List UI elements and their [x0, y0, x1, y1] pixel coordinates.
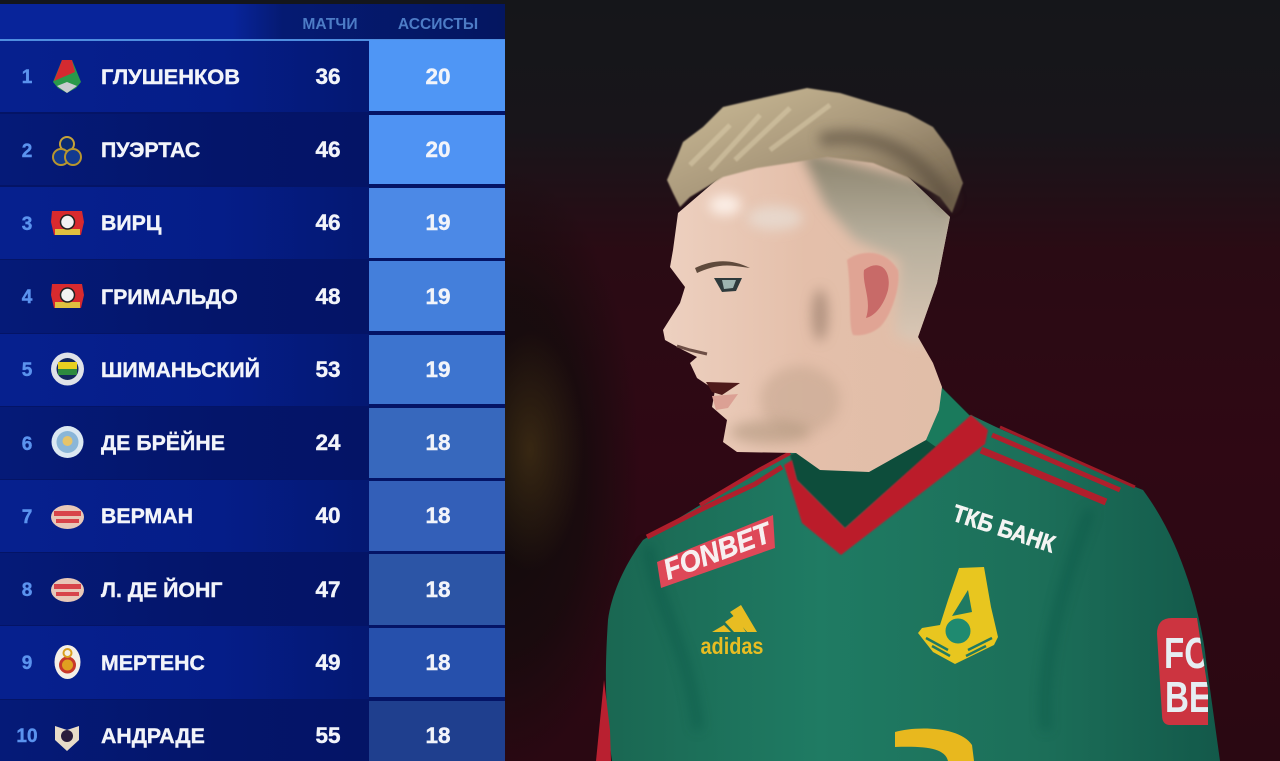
jaw and stubble	[760, 366, 840, 434]
inner collar	[790, 387, 971, 528]
row 3: ВИРЦ	[101, 211, 162, 235]
eye and brow	[695, 261, 750, 273]
nose shadow	[677, 346, 707, 354]
row 10: АНДРАДЕ	[101, 724, 205, 748]
ear	[847, 253, 899, 335]
row 6: 18	[425, 430, 451, 455]
row 10	[0, 700, 505, 761]
hair highlights	[690, 105, 830, 170]
row 6: ДЕ БРЁЙНЕ	[101, 430, 225, 455]
row 5: ШИМАНЬСКИЙ	[101, 357, 260, 382]
row 9	[0, 626, 505, 699]
photo: player background	[505, 0, 1280, 761]
row 1: 1	[22, 67, 33, 88]
row 3	[0, 187, 505, 259]
row 6	[0, 407, 505, 479]
row 8: Л. ДЕ ЙОНГ	[101, 577, 222, 602]
row 6: 24	[315, 430, 341, 455]
FONBET sponsor: FONBET	[659, 517, 777, 587]
table header: АССИСТЫ	[398, 16, 478, 33]
row 1: 20	[425, 64, 451, 89]
row 4: ГРИМАЛЬДО	[101, 285, 238, 309]
row 4	[0, 260, 505, 333]
collar green fold	[926, 387, 971, 447]
temple fade	[800, 150, 960, 345]
left sleeve print	[596, 680, 611, 761]
sleeve patch: BE	[1165, 673, 1211, 722]
row 1: 36	[315, 64, 341, 89]
adidas logo	[700, 605, 764, 659]
shirt number fragment	[895, 728, 974, 761]
row 5: 19	[425, 357, 451, 382]
row 7: ВЕРМАН	[101, 504, 193, 528]
hair	[667, 88, 963, 213]
row 8: 18	[425, 577, 451, 602]
row 4: 19	[425, 284, 451, 309]
row 9: 9	[22, 653, 32, 674]
table header: МАТЧИ	[302, 16, 358, 33]
table header	[0, 0, 505, 41]
panel: assists table	[0, 0, 505, 761]
sleeve seam shadows	[648, 510, 1090, 730]
ТКБ БАНК sponsor: ТКБ БАНК	[949, 500, 1059, 559]
row 7: 40	[315, 503, 341, 528]
club crest on shirt	[918, 567, 998, 664]
sleeve patch	[1157, 618, 1208, 725]
photo: player	[596, 88, 1220, 761]
row 4: 48	[315, 284, 341, 309]
row 2: 46	[315, 137, 341, 162]
row 6: 6	[22, 434, 32, 455]
red collar	[784, 415, 988, 555]
row 10: 55	[315, 723, 341, 748]
row 7	[0, 480, 505, 552]
row 8	[0, 553, 505, 625]
row 7: 7	[22, 507, 32, 528]
row 7: 18	[425, 503, 451, 528]
row 5: 53	[315, 357, 341, 382]
row 2: 20	[425, 137, 451, 162]
sleeve patch: FO	[1164, 629, 1210, 678]
row 1: ГЛУШЕНКОВ	[101, 65, 240, 89]
head and neck	[663, 156, 950, 472]
row 8: 47	[315, 577, 341, 602]
row 2: 2	[22, 141, 32, 162]
adidas logo: adidas	[700, 633, 764, 659]
hair underside shadow	[820, 138, 950, 205]
row 3: 3	[22, 214, 32, 235]
shirt	[606, 415, 1220, 761]
row 4: 4	[22, 287, 33, 308]
row 5	[0, 334, 505, 406]
row 9: 18	[425, 650, 451, 675]
row 5: 5	[22, 360, 33, 381]
row 3: 46	[315, 210, 341, 235]
mouth	[706, 382, 740, 395]
row 10: 10	[16, 726, 38, 747]
row 10: 18	[425, 723, 451, 748]
row 8: 8	[22, 580, 32, 601]
forehead highlight	[709, 195, 741, 215]
row 9: 49	[315, 650, 341, 675]
row 3: 19	[425, 210, 451, 235]
left shoulder stripes	[647, 467, 782, 537]
row 9: МЕРТЕНС	[101, 651, 205, 675]
row 1	[0, 40, 505, 112]
row 2: ПУЭРТАС	[101, 138, 200, 162]
row 2	[0, 114, 505, 185]
right shoulder stripes	[981, 450, 1106, 502]
